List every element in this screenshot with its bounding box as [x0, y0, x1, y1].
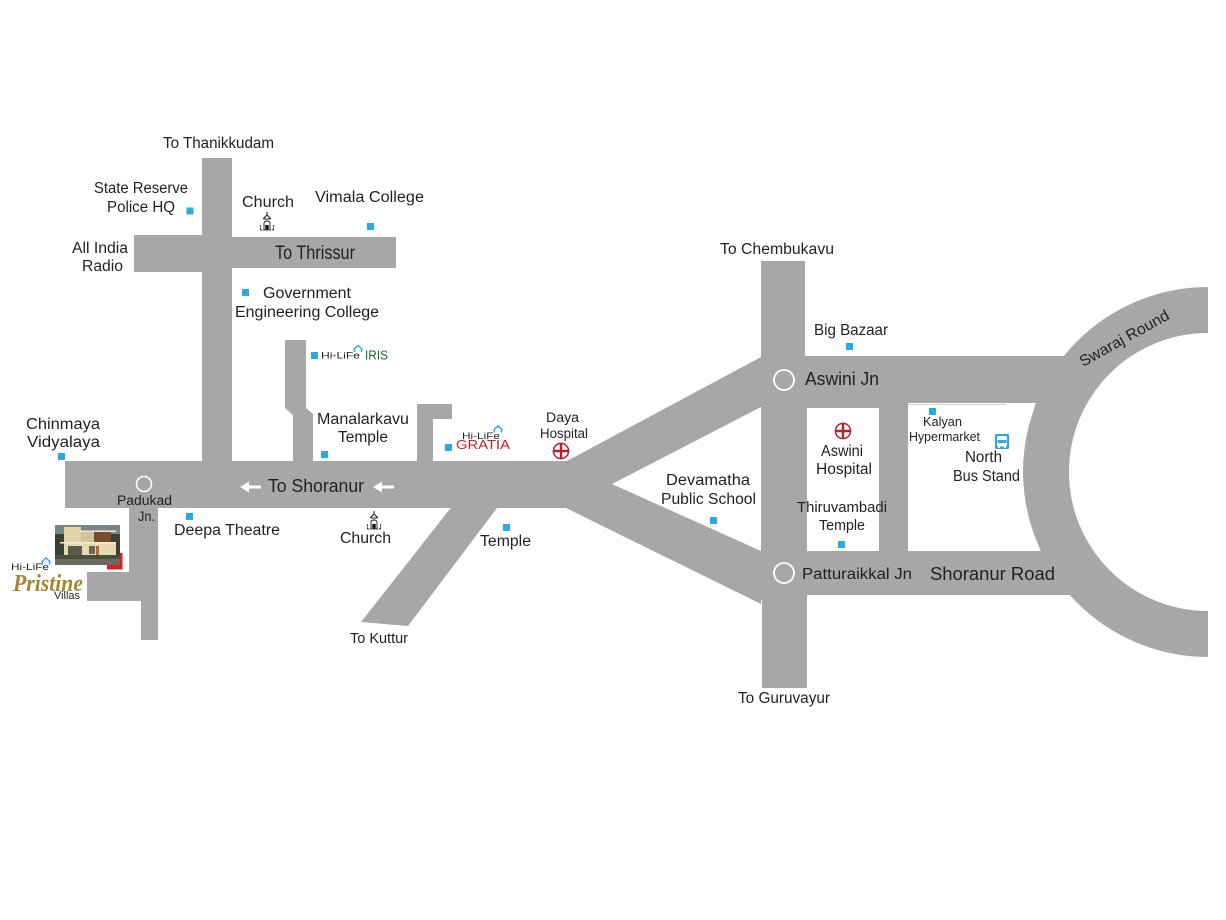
direction arrows	[240, 482, 394, 492]
label: Thiruvambadi: Thiruvambadi	[797, 500, 887, 516]
logo: Hi-Life Gratia: GRATIA	[456, 438, 511, 452]
label: Hypermarket: Hypermarket	[909, 429, 980, 444]
label: Public School: Public School	[661, 491, 756, 508]
arrow right	[373, 482, 394, 492]
road: to Shoranur main	[65, 357, 761, 604]
label: Patturaikkal Jn: Patturaikkal Jn	[802, 566, 912, 583]
logo: Hi-Life Iris: IRIS	[365, 348, 388, 362]
logo: Hi-Life Iris: Hi-LiFe	[321, 350, 360, 360]
label: Shoranur Road: Shoranur Road	[930, 563, 1055, 584]
label: Church: Church	[242, 194, 294, 211]
icon: church south	[368, 511, 380, 529]
label: Aswini: Aswini	[821, 443, 863, 460]
label: Daya: Daya	[546, 410, 580, 425]
label: Vidyalaya: Vidyalaya	[27, 434, 100, 451]
label: To Thanikkudam: To Thanikkudam	[163, 135, 274, 152]
label: Jn.: Jn.	[138, 509, 155, 524]
label: Hospital: Hospital	[540, 426, 588, 441]
label: North: North	[965, 449, 1002, 466]
block: North Bus Stand	[908, 403, 1041, 551]
label: All India: All India	[72, 240, 128, 257]
road: Iris branch	[285, 340, 313, 465]
marker: Padukad Jn	[136, 476, 152, 492]
label: Padukad: Padukad	[117, 493, 172, 508]
road: to Thrissur horizontal	[134, 235, 396, 272]
arrow left	[240, 482, 261, 492]
logo: Hi-Life Pristine Villas: Hi-LiFe	[11, 562, 49, 572]
label: Chinmaya: Chinmaya	[26, 416, 100, 433]
label: Kalyan: Kalyan	[923, 414, 962, 429]
label: Hospital: Hospital	[816, 461, 872, 478]
label: Bus Stand: Bus Stand	[953, 468, 1020, 485]
logo: Hi-Life Pristine Villas	[11, 558, 83, 602]
icon: bus	[995, 434, 1009, 449]
label: Devamatha: Devamatha	[666, 472, 750, 489]
road: Shoranur Road horizontal	[761, 551, 1073, 595]
logo: Hi-Life Gratia: Hi-LiFe	[462, 431, 500, 441]
location markers	[58, 208, 936, 548]
label: Vimala College: Vimala College	[315, 189, 424, 206]
house photo	[55, 525, 122, 570]
label: Temple south: Temple	[480, 533, 531, 550]
north labels	[72, 135, 424, 321]
label: Swaraj Round: Swaraj Round	[1077, 307, 1172, 370]
label: Aswini Jn: Aswini Jn	[805, 368, 879, 389]
label: Police HQ: Police HQ	[107, 199, 175, 216]
road: Padukad branch	[87, 505, 158, 640]
label: Temple: Temple	[819, 518, 865, 534]
inner triangle cut	[612, 407, 761, 551]
logo: Hi-Life Pristine Villas: Villas	[54, 590, 80, 602]
label: Engineering College: Engineering College	[235, 304, 379, 321]
label: Manalarkavu: Manalarkavu	[317, 411, 409, 428]
label: To Thrissur: To Thrissur	[275, 243, 356, 264]
label: Government: Government	[263, 285, 352, 302]
label: Church south: Church	[340, 530, 391, 547]
road: Gratia branch	[417, 404, 452, 465]
label: To Chembukavu: To Chembukavu	[720, 241, 834, 258]
road: vertical Chembukavu to Guruvayur	[761, 261, 807, 688]
road: connector	[879, 400, 908, 560]
label: Deepa Theatre: Deepa Theatre	[174, 522, 280, 539]
logo: Hi-Life Gratia	[456, 426, 511, 452]
label: To Guruvayur: To Guruvayur	[738, 690, 830, 707]
road: to Thanikkudam vertical	[202, 158, 232, 468]
label: To Kuttur: To Kuttur	[350, 631, 408, 647]
road: to Kuttur	[361, 505, 497, 626]
road: Swaraj Round ring	[1023, 287, 1208, 657]
icon: Aswini Hospital cross	[835, 423, 851, 439]
marker: Patturaikkal Jn	[774, 563, 794, 583]
roads network	[65, 158, 1208, 688]
logo: Hi-Life Iris	[321, 346, 388, 362]
icon: Daya Hospital cross	[553, 443, 569, 459]
label: Temple: Temple	[338, 429, 388, 446]
block: Aswini Hospital	[807, 408, 879, 551]
label: Radio: Radio	[82, 258, 123, 275]
icon: church north	[260, 212, 274, 230]
label: State Reserve: State Reserve	[94, 180, 188, 197]
central labels	[26, 410, 756, 647]
road: Aswini Jn horizontal	[761, 356, 1071, 408]
junction markers	[136, 370, 794, 583]
marker: Aswini Jn	[774, 370, 794, 390]
logo: Hi-Life Pristine Villas: Pristine	[12, 571, 83, 597]
label: To Shoranur: To Shoranur	[268, 476, 364, 496]
label: Big Bazaar: Big Bazaar	[814, 322, 888, 339]
east labels	[720, 241, 1172, 707]
